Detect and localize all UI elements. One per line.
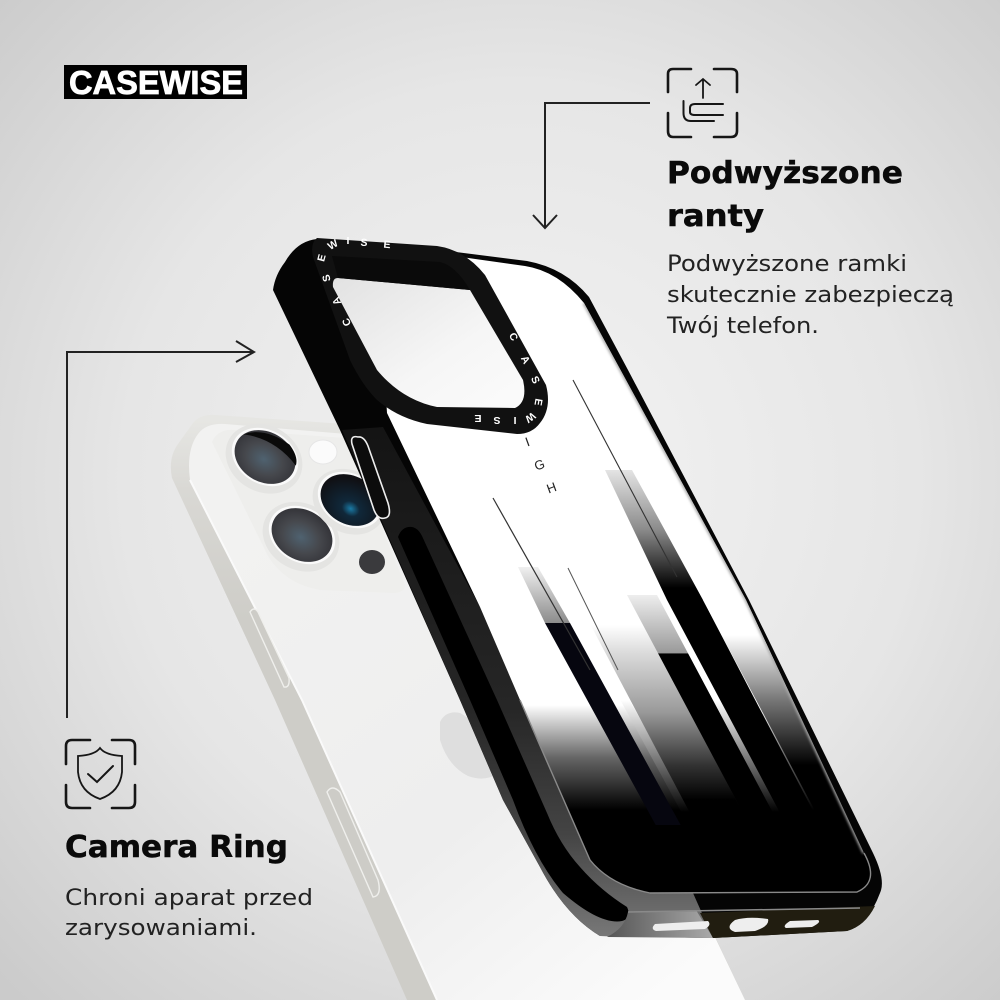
charging port and speaker holes [653,918,819,932]
ring engraved text: W [522,409,538,425]
camera ring [312,238,548,434]
soft inner edge shadow [584,303,864,853]
heading: raised edges [667,156,903,234]
ring engraved text: S [360,237,368,249]
logo: CASEWISE [69,64,243,101]
ring engraved text: E [383,239,391,251]
arrow: left [67,341,254,718]
stripe G [703,600,864,852]
text: camera ring description [65,886,313,941]
heading: raised edges: ranty [667,199,764,234]
ring engraved text: S [320,273,334,283]
ring engraved text: E [315,253,329,263]
case front face [380,254,871,893]
text: raised edges description [666,252,954,339]
stripe F [627,595,768,806]
ring engraved text: E [531,398,545,406]
ring engraved text: A [330,295,344,307]
stripe left grey [518,567,570,623]
face artwork [492,302,870,892]
text: camera ring description: zarysowaniami. [65,916,257,941]
lower side tint [342,427,713,938]
lens 3 [301,456,397,548]
edge highlight [190,480,437,1000]
ring engraved text: W [326,237,340,253]
lens 2 [250,488,352,585]
text: camera ring description: Chroni aparat przed [65,886,313,911]
phone side band [171,415,745,1000]
white iPhone behind the case [171,410,745,1000]
bottom band olive [700,906,875,938]
face edge highlight [520,700,871,893]
bottom black [656,825,864,892]
arrow: top [533,103,650,228]
heading: camera ring: Camera Ring [65,830,288,865]
stripe white line [622,704,682,798]
ring engraved text: C [340,316,354,328]
stripe B [545,623,680,825]
flash [309,440,337,464]
apple logo [440,712,497,779]
ring engraved text: A [518,354,532,367]
stripe E [605,470,810,806]
stripe white gap [689,655,772,798]
ring engraved text: I [513,414,516,426]
text: raised edges description: skutecznie zabezpieczą [667,283,954,308]
stripe s3 [594,631,738,808]
I G H text: G [532,456,547,474]
text: raised edges description: Twój telefon. [666,314,819,339]
I G H text: H [544,479,558,496]
phone body [189,424,745,1000]
icon: shield [66,740,135,808]
ring engraved text: S [528,374,542,386]
thin line top right [573,380,677,577]
lidar [359,550,385,574]
case outer shell [273,239,882,938]
ring engraved text: I [347,235,350,247]
ring engraved text: S [493,414,501,426]
bottom highlight [628,908,860,912]
I G H text [523,434,558,496]
lens 1 [213,410,315,507]
base fade [524,708,864,852]
text: raised edges description: Podwyższone ramki [667,252,907,277]
side slot [398,527,629,921]
bottom band translucent [607,910,713,938]
volume button [352,437,389,518]
lens opening [333,278,524,408]
thin line mid [568,568,618,670]
inner ring wall [332,256,470,290]
icon: raised edges [668,69,737,137]
side buttons [250,609,379,897]
camera plateau [212,430,405,593]
I G H text: I [523,434,532,449]
ring engraved text [315,235,545,426]
thin line A [493,498,590,670]
ring engraved text: E [474,412,482,424]
transparent black case [273,235,915,938]
ring engraved text: C [506,331,520,344]
heading: raised edges: Podwyższone [667,156,903,191]
